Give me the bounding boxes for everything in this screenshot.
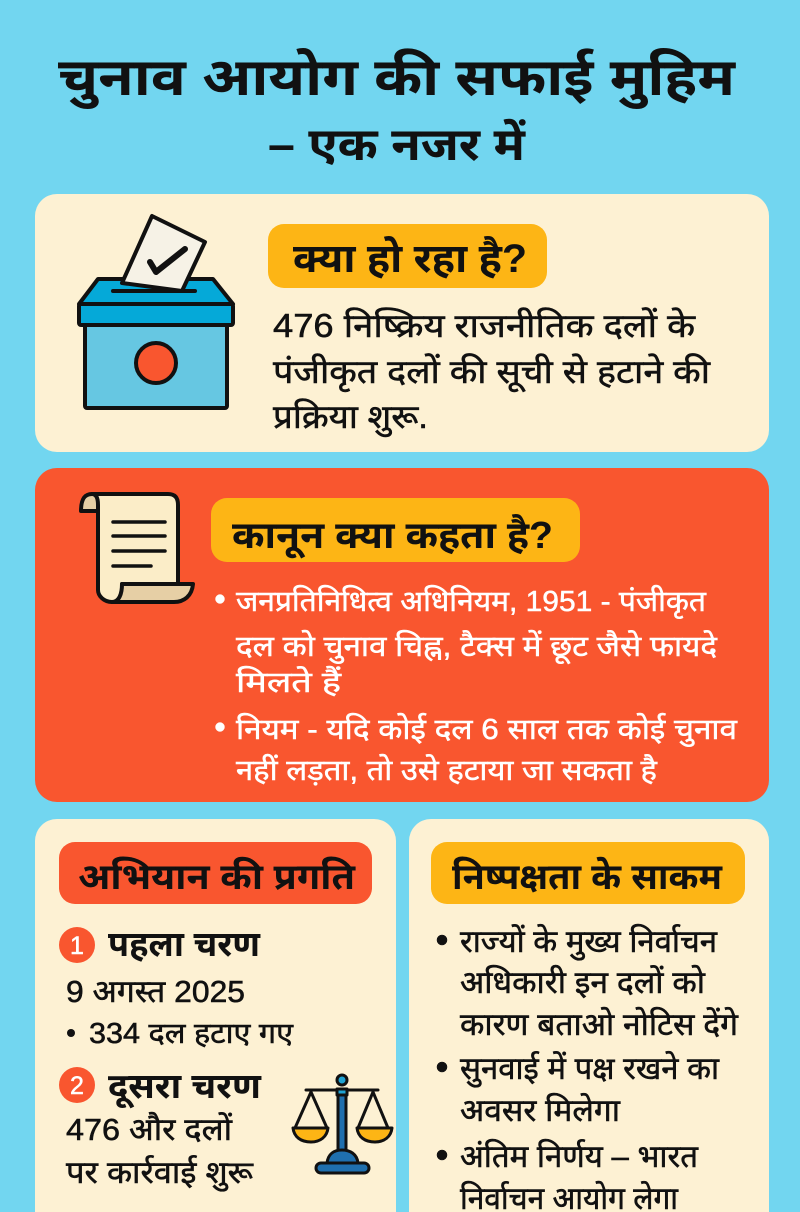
text: what is happening: प्रक्रिया शुरू.: [273, 398, 428, 437]
text: first law bullet: [216, 585, 718, 699]
text: what is happening: [273, 306, 712, 437]
text: second law bullet: नहीं लड़ता, तो उसे हटाया जा सकता है: [236, 754, 658, 787]
step 2: [59, 1067, 262, 1191]
step 1: पहला चरण: [108, 925, 261, 964]
text: notice bullet: कारण बताओ नोटिस देंगे: [460, 1007, 739, 1042]
panel: what is happening: [35, 194, 769, 452]
heading: what is happening: [268, 224, 547, 288]
text: first law bullet: दल को चुनाव चिह्न, टैक्स में छूट जैसे फायदे: [236, 630, 718, 664]
text: final decision bullet: [437, 1139, 699, 1212]
text: first law bullet: जनप्रतिनिधित्व अधिनियम, 1951 - पंजीकृत: [236, 585, 706, 619]
icon: ballot box: [79, 216, 233, 408]
step 2: दूसरा चरण: [108, 1067, 262, 1109]
text: notice bullet: अधिकारी इन दलों को: [460, 965, 706, 1000]
heading: what the law says: कानून क्या कहता है?: [232, 513, 553, 559]
heading: campaign progress: [59, 842, 372, 904]
step 1: [59, 925, 294, 1050]
title: – एक नजर में: [268, 118, 526, 170]
text: hearing bullet: [437, 1051, 720, 1128]
heading: what is happening: क्या हो रहा है?: [293, 235, 527, 281]
text: hearing bullet: सुनवाई में पक्ष रखने का: [460, 1051, 720, 1087]
text: second law bullet: नियम - यदि कोई दल 6 साल तक कोई चुनाव: [236, 713, 738, 747]
panel: what the law says: [35, 468, 769, 802]
text: what is happening: 476 निष्क्रिय राजनीतिक दलों के: [273, 306, 696, 344]
heading: fairness safeguards: निष्पक्षता के साकम: [452, 855, 723, 897]
text: notice bullet: [437, 924, 739, 1042]
text: first law bullet: मिलते हैं: [236, 666, 342, 699]
step 2: 476 और दलों: [66, 1112, 233, 1147]
heading: campaign progress: अभियान की प्रगति: [78, 856, 356, 897]
icon: scroll: [81, 494, 193, 602]
panel: campaign progress: [35, 819, 396, 1212]
panel: fairness safeguards: [409, 819, 769, 1212]
step 1: 334 दल हटाए गए: [89, 1018, 294, 1050]
text: final decision bullet: अंतिम निर्णय – भारत: [460, 1139, 699, 1174]
heading: fairness safeguards: [431, 842, 745, 904]
step 2: पर कार्रवाई शुरू: [66, 1155, 254, 1191]
heading: what the law says: [211, 498, 580, 562]
step 1: 9 अगस्त 2025: [66, 974, 245, 1009]
step 2: 2: [70, 1072, 84, 1100]
title: चुनाव आयोग की सफाई मुहिम: [58, 48, 736, 110]
step 1: 1: [70, 932, 84, 960]
text: notice bullet: राज्यों के मुख्य निर्वाचन: [460, 924, 718, 960]
text: what is happening: पंजीकृत दलों की सूची से हटाने की: [273, 352, 712, 392]
text: hearing bullet: अवसर मिलेगा: [460, 1093, 621, 1128]
text: second law bullet: [216, 713, 738, 787]
title: [58, 48, 736, 170]
icon: scales of justice: [293, 1075, 392, 1173]
